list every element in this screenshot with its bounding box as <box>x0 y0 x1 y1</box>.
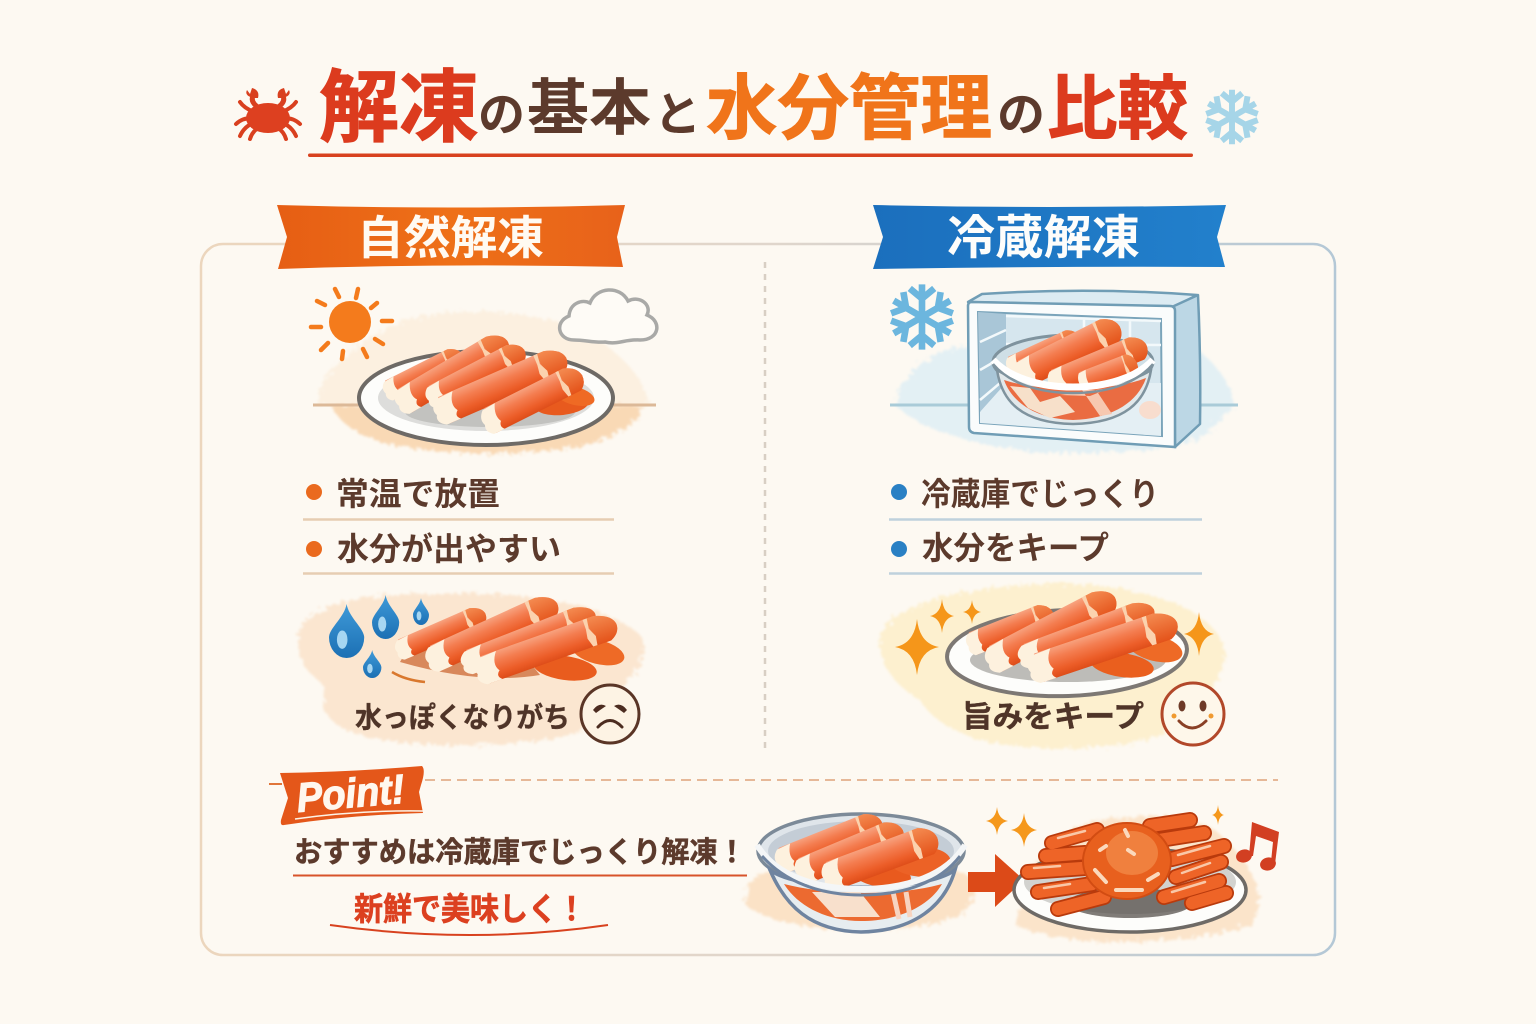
heading: の: の <box>478 88 525 141</box>
icon: sad face <box>581 685 639 743</box>
label: 旨みをキープ: 旨みをキープ <box>962 701 1144 734</box>
icon: sparkles <box>895 599 1214 675</box>
bullet item: 常温で放置 <box>336 476 500 512</box>
heading: 水分管理: 水分管理 <box>706 70 992 149</box>
icon: cloud <box>560 290 657 343</box>
heading: 基本: 基本 <box>527 74 651 142</box>
icon: happy face <box>1162 683 1224 745</box>
panel: natural thawing <box>277 205 657 745</box>
heading: の: の <box>997 88 1045 141</box>
label: 水っぽくなりがち: 水っぽくなりがち <box>355 701 570 733</box>
illustration: crab legs in refrigerator <box>888 284 1238 453</box>
heading: と: と <box>654 88 701 141</box>
crab legs <box>392 590 627 687</box>
icon: snowflake <box>1203 90 1261 144</box>
arrow <box>968 854 1024 907</box>
bullet item: 水分をキープ <box>922 530 1109 566</box>
list: natural thawing points <box>303 476 614 574</box>
illustration: crab legs on plate at room temperature <box>311 289 657 453</box>
list: refrigerator thawing points <box>889 476 1202 574</box>
plate <box>359 351 613 445</box>
result: watery crab legs <box>298 590 643 745</box>
bullet item: 冷蔵庫でじっくり <box>921 476 1159 512</box>
heading: 解凍: 解凍 <box>319 63 479 152</box>
crab body <box>1083 823 1171 899</box>
icon: crab <box>236 88 300 139</box>
banner: 自然解凍: 自然解凍 <box>357 212 544 264</box>
text: fresh and delicious: 新鮮で美味しく！ <box>354 891 586 927</box>
icon: music note <box>1235 822 1279 872</box>
icon: water drops <box>329 595 429 678</box>
icon: sun <box>311 289 392 359</box>
title underline <box>308 154 1193 157</box>
illustration: bowl of crab legs <box>745 809 974 932</box>
title <box>236 63 1261 157</box>
icon: sparkles <box>986 805 1224 847</box>
result: juicy crab legs <box>880 584 1225 748</box>
heading: 比較: 比較 <box>1047 70 1188 148</box>
panel: comparison frame <box>201 244 1335 955</box>
icon: snowflake <box>888 284 956 350</box>
bullet item: 水分が出やすい <box>337 531 561 567</box>
illustration: crab on plate <box>986 805 1279 942</box>
panel: refrigerator thawing <box>873 205 1238 748</box>
crab legs <box>1028 820 1226 909</box>
column divider <box>764 262 766 748</box>
crab legs <box>963 584 1185 685</box>
banner: 冷蔵解凍 <box>873 205 1226 269</box>
plate <box>946 606 1188 700</box>
banner: 冷蔵解凍: 冷蔵解凍 <box>947 211 1140 264</box>
refrigerator <box>968 291 1200 447</box>
crab legs <box>379 328 597 436</box>
banner: 自然解凍 <box>277 205 625 269</box>
text: recommendation: おすすめは冷蔵庫でじっくり解凍！ <box>294 836 746 869</box>
panel: point section <box>269 766 1279 942</box>
badge: Point!: Point! <box>295 766 406 821</box>
glass bowl <box>993 313 1153 424</box>
